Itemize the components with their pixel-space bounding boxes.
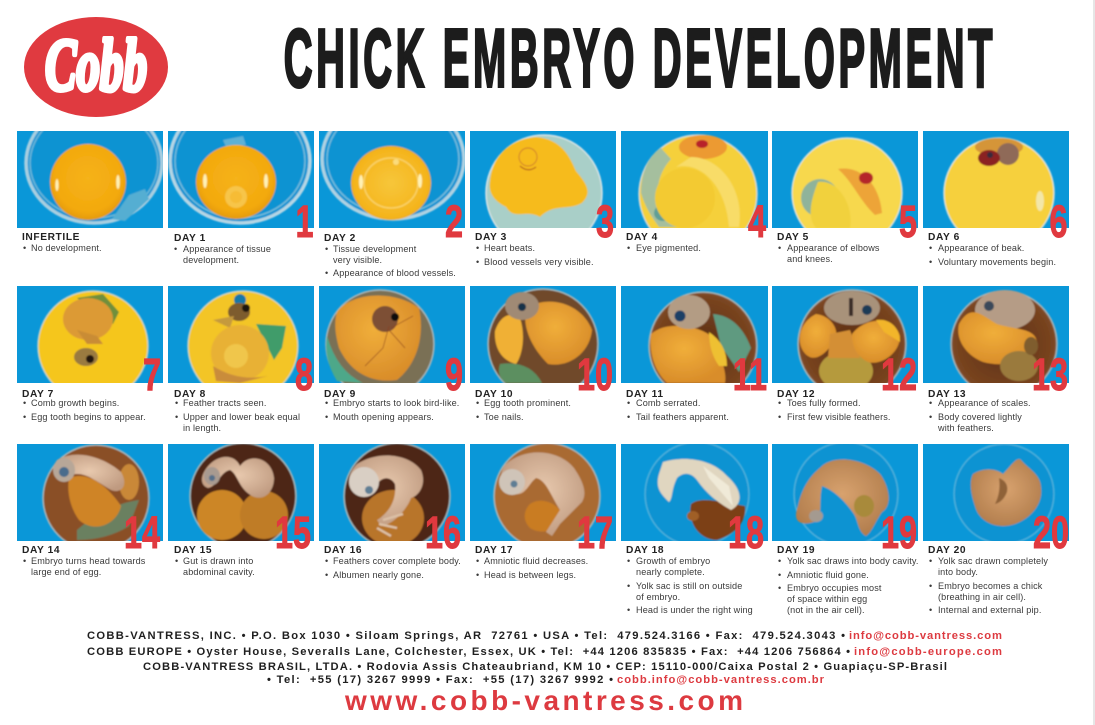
description: Comb serrated. (636, 398, 700, 408)
photo: day 15 embryo (168, 444, 314, 541)
description: Toes fully formed. (787, 398, 861, 408)
description: • (778, 398, 781, 408)
description: • (325, 268, 328, 278)
photo: day 2 yolk (319, 131, 465, 228)
description: Albumen nearly gone. (333, 570, 424, 580)
number: 12 (881, 351, 917, 400)
panel: day 20 (923, 444, 1069, 615)
description: of space within egg (787, 594, 867, 604)
website: www.cobb-vantress.com (344, 685, 743, 716)
description: • (778, 412, 781, 422)
description: • (476, 398, 479, 408)
number: 19 (881, 509, 917, 558)
number: 18 (728, 509, 764, 558)
logo: Cobb (24, 17, 168, 117)
number: 6 (1049, 198, 1068, 247)
heading: DAY 12 (777, 389, 815, 400)
description: Heart beats. (484, 243, 535, 253)
heading: DAY 20 (928, 545, 966, 556)
heading: DAY 4 (626, 232, 658, 243)
description: • (174, 244, 177, 254)
description: • (778, 556, 781, 566)
panel: day 19 (772, 442, 919, 615)
description: • (325, 570, 328, 580)
heading: DAY 16 (324, 545, 362, 556)
description: • (476, 257, 479, 267)
description: • (325, 412, 328, 422)
description: • (627, 556, 630, 566)
contact line: Europe: info@cobb-europe.com (854, 646, 1002, 658)
description: Appearance of blood vessels. (333, 268, 456, 278)
description: very visible. (333, 255, 382, 265)
description: • (778, 583, 781, 593)
description: Voluntary movements begin. (938, 257, 1056, 267)
description: • (929, 605, 932, 615)
footer: contact details (87, 630, 1002, 716)
description: Amniotic fluid gone. (787, 570, 869, 580)
description: development. (183, 255, 239, 265)
description: Feather tracts seen. (183, 398, 266, 408)
description: Head is under the right wing (636, 605, 753, 615)
heading: DAY 13 (928, 389, 966, 400)
photo: infertile yolk (17, 131, 163, 228)
photo: day 6 yolk (923, 131, 1069, 228)
description: • (476, 556, 479, 566)
number: 5 (899, 198, 917, 247)
description: • (23, 398, 26, 408)
description: large end of egg. (31, 567, 101, 577)
heading: DAY 18 (626, 545, 664, 556)
description: Appearance of scales. (938, 398, 1031, 408)
panel: day 3 (470, 131, 616, 267)
panel: day 5 (772, 131, 918, 264)
description: Amniotic fluid decreases. (484, 556, 588, 566)
description: • (929, 257, 932, 267)
panel: day 10 (470, 286, 616, 422)
number: 15 (275, 509, 311, 558)
number: 10 (577, 351, 613, 400)
description: nearly complete. (636, 567, 705, 577)
heading: DAY 14 (22, 545, 60, 556)
contact line: Europe: COBB EUROPE • Oyster House, Severalls Lane, Colchester, Essex, UK • Tel: +44 1206 835835 • Fax: +44 1206 756864 • (87, 646, 850, 658)
photo: day 20 chick (923, 444, 1069, 541)
description: Upper and lower beak equal (183, 412, 300, 422)
heading: DAY 10 (475, 389, 513, 400)
number: 1 (295, 198, 314, 247)
panel: day 4 (621, 131, 768, 253)
description: Embryo turns head towards (31, 556, 146, 566)
heading: DAY 7 (22, 389, 54, 400)
photo: day 16 embryo (319, 444, 465, 541)
panel: day 12 (772, 286, 918, 422)
description: • (23, 556, 26, 566)
photo: day 12 embryo (772, 286, 918, 383)
description: Feathers cover complete body. (333, 556, 461, 566)
description: • (627, 412, 630, 422)
number: 3 (596, 198, 614, 247)
description: Blood vessels very visible. (484, 257, 594, 267)
heading: DAY 2 (324, 233, 356, 244)
heading: INFERTILE (22, 232, 80, 243)
heading: DAY 19 (777, 545, 815, 556)
number: 14 (124, 509, 160, 558)
description: Gut is drawn into (183, 556, 253, 566)
panel: day 15 (168, 443, 314, 577)
photo: day 9 embryo (319, 286, 465, 383)
number: 9 (445, 351, 463, 400)
logo: Cobb: Cobb (45, 25, 147, 107)
number: 2 (445, 198, 463, 247)
panel: day 14 (17, 444, 163, 577)
description: Yolk sac is still on outside (636, 581, 742, 591)
description: • (175, 412, 178, 422)
panel: day 18 (621, 442, 768, 615)
description: Head is between legs. (484, 570, 576, 580)
description: of embryo. (636, 592, 680, 602)
photo: day 7 embryo (17, 286, 163, 383)
description: (not in the air cell). (787, 605, 865, 615)
description: Tail feathers apparent. (636, 412, 729, 422)
description: Embryo occupies most (787, 583, 882, 593)
description: Comb growth begins. (31, 398, 119, 408)
number: 4 (748, 198, 766, 247)
panel: day 16 (319, 443, 465, 580)
description: in length. (183, 423, 221, 433)
description: Toe nails. (484, 412, 524, 422)
description: • (778, 243, 781, 253)
heading: DAY 3 (475, 232, 507, 243)
panel: day 6 (923, 131, 1069, 267)
description: • (627, 243, 630, 253)
description: Egg tooth prominent. (484, 398, 571, 408)
description: Egg tooth begins to appear. (31, 412, 146, 422)
heading: DAY 1 (174, 233, 206, 244)
number: 7 (143, 351, 161, 400)
description: Mouth opening appears. (333, 412, 434, 422)
heading: DAY 6 (928, 232, 960, 243)
description: Internal and external pip. (938, 605, 1041, 615)
description: Appearance of elbows (787, 243, 880, 253)
description: Yolk sac drawn completely (938, 556, 1048, 566)
photo: day 10 embryo (470, 286, 616, 383)
contact line: Brasil phone: cobb.info@cobb-vantress.com.br (617, 674, 825, 686)
description: Embryo starts to look bird-like. (333, 398, 459, 408)
panel: day 8 (168, 286, 314, 433)
number: 11 (733, 351, 767, 400)
contact line: Brasil: COBB-VANTRESS BRASIL, LTDA. • Rodovia Assis Chateaubriand, KM 10 • CEP: 15110-000/Caixa Postal 2 • Guapiaçu-SP-Brasil (143, 661, 947, 673)
description: Embryo becomes a chick (938, 581, 1043, 591)
photo: day 13 embryo (923, 286, 1069, 383)
panel: infertile (17, 103, 163, 253)
description: Appearance of tissue (183, 244, 271, 254)
panel: day 1 (168, 99, 314, 265)
photo: day 1 yolk (168, 131, 314, 228)
number: 17 (577, 509, 613, 558)
panel: day 11 (621, 286, 768, 422)
description: with feathers. (937, 423, 994, 433)
panel: day 2 (319, 99, 465, 278)
description: • (929, 412, 932, 422)
description: • (627, 398, 630, 408)
description: Appearance of beak. (938, 243, 1024, 253)
description: • (476, 570, 479, 580)
description: • (175, 398, 178, 408)
contact line: Brasil phone: • Tel: +55 (17) 3267 9999 • Fax: +55 (17) 3267 9992 • (267, 674, 613, 686)
contact line: USA: info@cobb-vantress.com (849, 630, 1002, 642)
description: • (23, 243, 26, 253)
description: into body. (938, 567, 978, 577)
description: Tissue development (333, 244, 417, 254)
description: • (175, 556, 178, 566)
photo: day 11 embryo (621, 286, 768, 383)
description: • (325, 244, 328, 254)
panel: day 13 (923, 286, 1069, 433)
photo: day 4 yolk (621, 131, 768, 228)
description: and knees. (787, 254, 833, 264)
panel: day 9 (319, 286, 465, 422)
number: 16 (425, 509, 461, 558)
number: 13 (1032, 351, 1068, 400)
panel: day 7 (17, 286, 163, 422)
photo: day 17 embryo (470, 444, 616, 541)
description: • (325, 556, 328, 566)
number: 20 (1033, 509, 1069, 558)
photo: day 18 embryo (621, 444, 768, 541)
description: • (778, 570, 781, 580)
photo: day 19 embryo (772, 444, 918, 541)
description: • (627, 581, 630, 591)
description: Growth of embryo (636, 556, 710, 566)
description: abdominal cavity. (183, 567, 255, 577)
description: • (476, 243, 479, 253)
description: • (476, 412, 479, 422)
heading: DAY 11 (626, 389, 664, 400)
photo: day 8 embryo (168, 286, 314, 383)
description: • (929, 398, 932, 408)
photo: day 5 yolk (772, 131, 918, 228)
panel: day 17 (470, 443, 616, 580)
heading: DAY 5 (777, 232, 809, 243)
contact line: Brasil phone (267, 674, 825, 686)
description: • (929, 581, 932, 591)
description: Eye pigmented. (636, 243, 701, 253)
description: • (325, 398, 328, 408)
number: 8 (295, 351, 313, 400)
description: (breathing in air cell). (938, 592, 1026, 602)
contact line: USA: COBB-VANTRESS, INC. • P.O. Box 1030 • Siloam Springs, AR 72761 • USA • Tel: 479.524.3166 • Fax: 479.524.3043 • (87, 630, 845, 642)
description: • (23, 412, 26, 422)
description: • (929, 243, 932, 253)
description: • (929, 556, 932, 566)
description: No development. (31, 243, 102, 253)
description: Yolk sac draws into body cavity. (787, 556, 919, 566)
heading: DAY 15 (174, 545, 212, 556)
description: Body covered lightly (938, 412, 1022, 422)
photo: day 3 yolk (470, 131, 616, 228)
heading: DAY 8 (174, 389, 206, 400)
description: First few visible feathers. (787, 412, 891, 422)
heading: DAY 17 (475, 545, 513, 556)
title: CHICK EMBRYO DEVELOPMENT (284, 11, 996, 104)
description: • (627, 605, 630, 615)
heading: DAY 9 (324, 389, 356, 400)
photo: day 14 embryo (17, 444, 163, 541)
